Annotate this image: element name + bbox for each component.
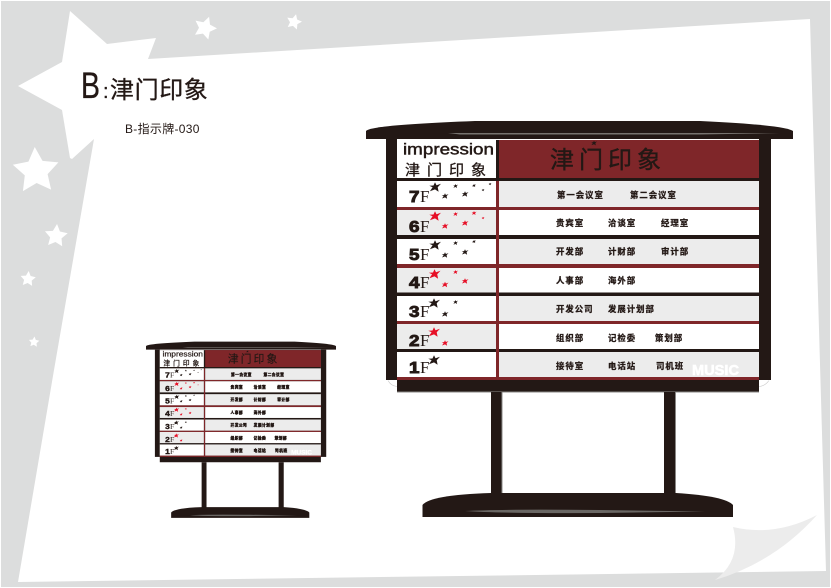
title: 津门印象 [110,77,208,104]
floor 3 row: 开发公司 [556,304,594,314]
small sign floor 2: 策划部 [275,436,287,441]
small sign floor 1: 1 [165,448,170,456]
small sign floor 5 [160,394,321,406]
sign base [422,493,733,517]
small sign floor 6 [160,381,321,393]
floor 7 row [397,181,759,207]
small sign floor 1: MUSIC [291,450,312,457]
floor 4 row: 4 [409,275,420,292]
small sign floor 6: F [170,384,174,393]
floor 7 row: 第一会议室 [557,190,604,200]
floor 5 row: F [420,245,429,264]
small sign floor 3: 开发公司 [231,423,247,428]
vertical divider [496,181,499,380]
floor 5 row: 审计部 [661,246,689,256]
small sign floor 1: F [170,447,174,456]
floor 3 row: F [420,302,429,321]
small sign floor 3: 3 [165,423,170,431]
small sign frame [155,350,326,462]
floor 7 row: 第二会议室 [630,190,677,200]
small sign header: 津门印象 [163,359,202,368]
sign panel background [397,140,759,380]
small sign floor 2: F [170,435,174,444]
small sign floor 5: 开发部 [231,397,243,402]
small sign floor 1: 电话站 [254,448,266,453]
small sign floor 1: 司机班 [275,448,288,453]
floor 2 row: 2 [409,333,420,350]
small sign floor 5: 审计部 [277,397,290,402]
small sign floor 6: 贵宾室 [231,384,243,389]
header title band [499,140,759,178]
small sign floor 1: 接待室 [231,448,243,453]
floor 4 row: F [420,273,429,292]
small sign floor 2: 2 [165,436,170,444]
page curl corner [715,515,817,580]
floor 6 row: 贵宾室 [556,218,584,228]
small sign floor 4: F [170,409,174,418]
small sign header [160,350,321,368]
small sign floor 7: 第一会议室 [231,372,252,377]
small sign floor 6: 经理室 [277,384,290,389]
title: : [103,81,109,103]
title [81,65,208,106]
floor 1 row: MUSIC [692,362,739,379]
small sign floor 3: F [170,422,174,431]
header logo block: 津门印象 [405,162,493,179]
floor 1 row [397,352,759,379]
small sign floor 4: 4 [165,410,170,418]
small sign floor 5: 计财部 [254,397,266,402]
small sign base [171,507,309,518]
floor 7 row: 7 [409,189,420,206]
floor 2 row: F [420,331,429,350]
small sign floor 7 [160,368,321,380]
small sign floor 7: 第二会议室 [263,372,284,377]
floor 2 row: 策划部 [655,333,683,343]
floor 1 row: 1 [409,360,420,377]
floor 6 row: 洽谈室 [608,218,636,228]
row dividers [397,207,759,380]
floor 6 row: F [420,217,429,236]
sign roof [366,121,793,139]
small sign floor 4: 人事部 [231,410,243,415]
floor 4 row [397,268,759,292]
floor 2 row: 组织部 [556,333,584,343]
floor 1 row: F [420,358,429,377]
subtitle code: B-指示牌-030 [125,121,200,136]
floor 7 row: F [420,187,429,206]
small sign floor 2: 记检委 [254,436,266,441]
small sign floor 5: 5 [165,397,170,405]
small sign floor 2: 组织部 [231,436,243,441]
floor 2 row: 记检委 [608,333,636,343]
small sign floor 3 [160,420,321,431]
sign posts and bottom beam [386,139,771,392]
floor 5 row [397,239,759,264]
sign legs [491,392,676,494]
small sign floor 1 [160,444,321,457]
floor 6 row: 经理室 [661,218,689,228]
small sign floor 3: 发展计划部 [254,423,275,428]
title: B [81,65,100,106]
floor 5 row: 计财部 [608,246,636,256]
header logo block: impression [403,142,494,158]
floor 5 row: 5 [409,247,420,264]
small sign floor 6: 洽谈室 [254,384,266,389]
large directory sign [366,121,793,517]
floor 5 row: 开发部 [556,246,584,256]
small sign floor 5: F [170,396,174,405]
small sign legs [202,462,284,508]
small sign dividers [160,368,321,457]
small sign floor 2 [160,432,321,444]
small sign header: impression [162,352,203,359]
small sign floor 4: 海外部 [254,410,266,415]
floor 1 row: 司机班 [656,361,684,371]
floor 2 row [397,324,759,350]
small sign floor 7: 7 [165,372,170,380]
header title band: 津门印象 [550,147,666,174]
floor 1 row: 电话站 [608,361,636,371]
floor 6 row [397,210,759,236]
floor 3 row: 3 [409,304,420,321]
floor 1 row: 接待室 [556,361,584,371]
floor 4 row: 海外部 [608,276,636,286]
floor 4 row: 人事部 [556,276,584,286]
small sign roof [146,342,336,350]
header logo block [397,140,496,179]
decorative white stars [12,12,303,347]
small sign header: 津门印象 [228,353,279,366]
small sign floor 7: F [170,371,174,380]
small sign floor 4 [160,407,321,418]
floor 3 row [397,296,759,321]
floor 6 row: 6 [409,219,420,236]
floor 3 row: 发展计划部 [608,304,655,314]
small directory sign [146,342,336,518]
small sign floor 6: 6 [165,385,170,393]
